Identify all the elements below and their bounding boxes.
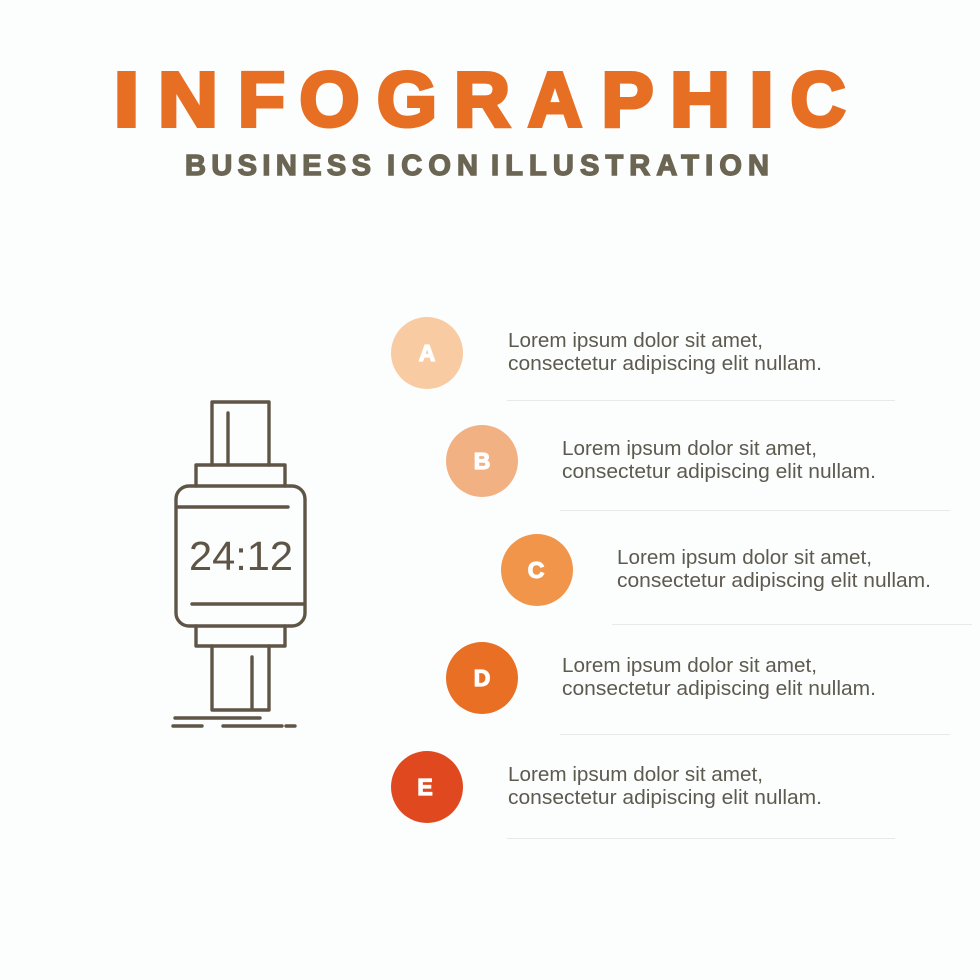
- text E: Lorem ipsum dolor sit amet,: [508, 764, 763, 786]
- text A: [508, 330, 822, 375]
- badge E: E: [417, 774, 433, 800]
- text A: consectetur adipiscing elit nullam.: [508, 353, 822, 375]
- top collar: [196, 465, 285, 486]
- title: F: [238, 57, 285, 143]
- text B: [562, 438, 876, 483]
- text C: Lorem ipsum dolor sit amet,: [617, 547, 872, 569]
- badge D: [446, 642, 518, 714]
- top strap: [212, 402, 269, 465]
- item E: [391, 751, 895, 839]
- text C: [617, 547, 931, 592]
- title: R: [454, 57, 510, 143]
- bottom strap: [212, 646, 269, 710]
- title: A: [528, 57, 582, 143]
- watch body: [176, 486, 305, 626]
- title: N: [158, 57, 218, 143]
- text A: Lorem ipsum dolor sit amet,: [508, 330, 763, 352]
- item C: [501, 534, 972, 625]
- subtitle: ILLUSTRATION: [491, 150, 769, 182]
- badge C: [501, 534, 573, 606]
- text E: [508, 764, 822, 809]
- title: C: [790, 57, 846, 143]
- text D: Lorem ipsum dolor sit amet,: [562, 655, 817, 677]
- badge D: D: [474, 665, 490, 691]
- icon: smartwatch: [173, 402, 305, 726]
- text C: consectetur adipiscing elit nullam.: [617, 570, 931, 592]
- text D: consectetur adipiscing elit nullam.: [562, 678, 876, 700]
- title: I: [749, 57, 774, 143]
- title: O: [300, 57, 360, 143]
- bottom collar: [196, 626, 285, 646]
- title: G: [377, 57, 437, 143]
- badge B: B: [474, 448, 490, 474]
- text B: Lorem ipsum dolor sit amet,: [562, 438, 817, 460]
- title: P: [602, 57, 654, 143]
- text E: consectetur adipiscing elit nullam.: [508, 787, 822, 809]
- ground lines: [173, 718, 295, 726]
- subtitle: [185, 150, 769, 182]
- text B: consectetur adipiscing elit nullam.: [562, 461, 876, 483]
- item B: [446, 425, 950, 511]
- item D: [446, 642, 950, 735]
- badge E: [391, 751, 463, 823]
- screen lines: [178, 507, 304, 604]
- title: H: [670, 57, 730, 143]
- title: I: [114, 57, 140, 143]
- badge A: A: [419, 340, 435, 366]
- text D: [562, 655, 876, 700]
- badge B: [446, 425, 518, 497]
- badge A: [391, 317, 463, 389]
- subtitle: ICON: [387, 150, 478, 182]
- time display: 24:12: [189, 533, 293, 579]
- badge C: C: [528, 557, 544, 583]
- subtitle: BUSINESS: [185, 150, 371, 182]
- item A: [391, 317, 895, 401]
